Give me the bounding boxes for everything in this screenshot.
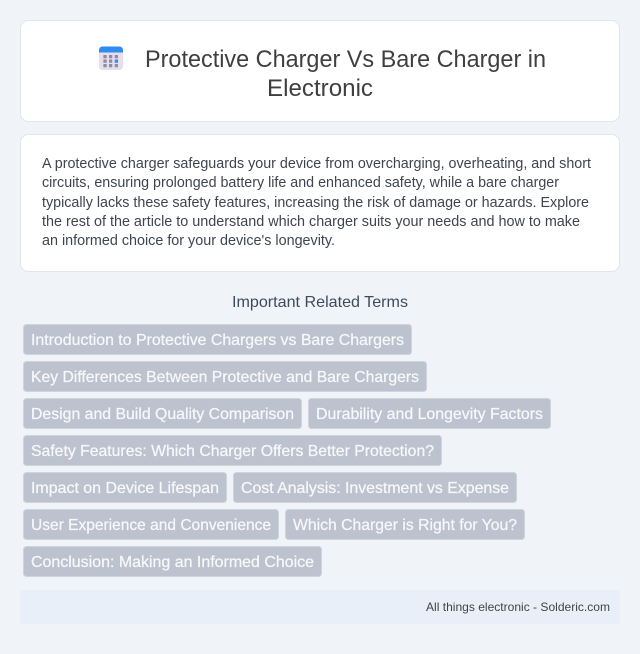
panel: intro text: typically lacks these safety features, increasing the risk of damage or hazards. Explore — [42, 195, 589, 211]
panel: intro text: the rest of the article to understand which charger suits your needs and how to make — [42, 214, 580, 230]
panel: intro text: an informed choice for your device's longevity. — [42, 233, 335, 249]
panel: intro text: A protective charger safeguards your device from overcharging, overheating, and short — [42, 156, 591, 172]
title — [145, 46, 546, 102]
tag list: Design and Build Quality Comparison — [31, 406, 294, 423]
footer: All things electronic - Solderic.com — [426, 600, 610, 614]
title: Protective Charger Vs Bare Charger in — [145, 46, 546, 73]
panel: intro text: circuits, ensuring prolonged battery life and enhanced safety, while a bare charger — [42, 175, 559, 191]
tag list: Durability and Longevity Factors — [316, 406, 543, 423]
tag list: Cost Analysis: Investment vs Expense — [241, 480, 509, 497]
tag list: Safety Features: Which Charger Offers Better Protection? — [31, 443, 434, 460]
panel: title card — [20, 20, 620, 122]
tag list: Impact on Device Lifespan — [31, 480, 219, 497]
footer — [20, 590, 620, 624]
tag list — [24, 324, 550, 576]
heading: important related terms: Important Related Terms — [232, 294, 408, 311]
title: Electronic — [267, 75, 373, 102]
icon: calendar — [99, 46, 123, 70]
tag list: Introduction to Protective Chargers vs Bare Chargers — [31, 332, 404, 349]
panel: intro text — [20, 134, 620, 272]
tag list: User Experience and Convenience — [31, 517, 271, 534]
tag list: Which Charger is Right for You? — [293, 517, 517, 534]
tag list: Conclusion: Making an Informed Choice — [31, 554, 314, 571]
tag list: Key Differences Between Protective and Bare Chargers — [31, 369, 419, 386]
